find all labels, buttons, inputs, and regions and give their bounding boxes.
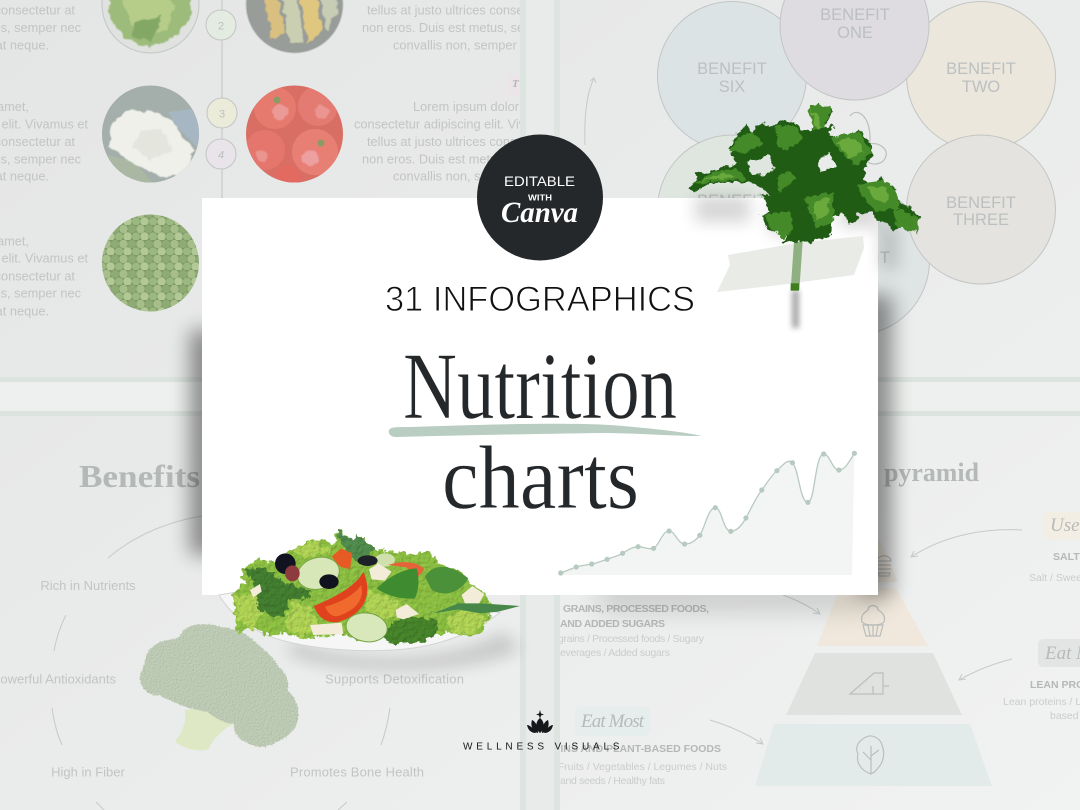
olive three	[358, 555, 378, 566]
circle: benefit five	[658, 135, 806, 284]
pyramid tier 2	[786, 653, 962, 715]
panel: benefits circle diagram	[585, 0, 1056, 335]
badge: editable with canva	[477, 134, 603, 260]
circle: benefit one: ONE	[837, 24, 873, 42]
right text blocks: tellus at justo ultrices consectetur at	[367, 134, 570, 149]
shadow: parsley on card	[695, 196, 898, 270]
right text blocks: Lorem ipsum dolor sit amet,	[413, 99, 571, 114]
photo: peas	[100, 212, 202, 314]
arrow: use sparingly to top tier	[911, 530, 1022, 557]
timeline node 4	[206, 139, 236, 169]
pyramid tier 3	[817, 588, 928, 646]
photo: lettuce	[107, 0, 193, 49]
text: grains and processed foods: grains / Processed foods / Sugary	[558, 633, 705, 645]
circle: benefit six: BENEFIT	[697, 60, 767, 78]
tomato wedge	[314, 572, 367, 622]
chart: rising line decoration	[558, 451, 857, 576]
right text blocks	[354, 5, 520, 182]
arrow: upward curve	[585, 78, 596, 145]
basil leaf two	[425, 567, 468, 593]
right text blocks: consectetur adipiscing elit. Vivamus et	[354, 116, 571, 132]
cucumber top	[294, 553, 343, 594]
circle: benefit two: BENEFIT	[946, 60, 1016, 78]
heading: pyramid: pyramid	[884, 457, 979, 487]
icon: centre food outline	[850, 112, 886, 164]
timeline node 4: 4	[218, 150, 224, 162]
icon: lotus	[527, 710, 553, 733]
olive two	[319, 574, 339, 589]
right text blocks: non eros. Duis est metus, semper nec	[362, 152, 578, 166]
panel: benefits wheel	[0, 458, 464, 810]
left text blocks: elit. Vivamus et	[1, 116, 88, 132]
chart line	[561, 453, 854, 573]
lettuce highlights	[235, 540, 487, 637]
label: rich in nutrients: Rich in Nutrients	[40, 578, 136, 593]
left text blocks: elit. Vivamus et	[1, 250, 88, 266]
timeline node 2: 2	[218, 20, 224, 32]
timeline node 2	[206, 10, 236, 40]
image: parsley sprig	[688, 103, 920, 291]
right text blocks: non eros. Duis est metus, semper nec	[362, 20, 578, 35]
label: promotes bone health: Promotes Bone Health	[290, 764, 424, 780]
right text blocks: T	[512, 78, 520, 90]
cheese pieces	[250, 563, 484, 635]
pyramid tier 4 top	[850, 540, 898, 582]
icon: cheese	[850, 673, 889, 694]
badge: editable with canva: WITH	[528, 192, 552, 202]
circle: benefit three: THREE	[953, 211, 1009, 229]
tag: use sparingly	[1043, 512, 1080, 540]
text: whole grains and plant foods: WHOLE GRAINS AND PLANT-BASED FOODS	[495, 743, 721, 755]
text: grains and processed foods	[558, 603, 709, 659]
circle: benefit six	[658, 2, 806, 150]
icon: lettuce leaf	[857, 736, 884, 774]
circle: benefit two	[906, 2, 1056, 150]
parsley bright leaves	[700, 110, 890, 220]
circle: benefit two: TWO	[962, 78, 1000, 96]
cucumber right top	[375, 553, 395, 567]
basil leaf	[377, 568, 418, 599]
logo text: WELLNESS VISUALS	[463, 742, 623, 752]
circle: benefit six: SIX	[719, 78, 745, 96]
cucumber bottom	[344, 610, 389, 644]
tag: eat most: Eat Most	[580, 711, 645, 732]
white card	[202, 198, 878, 595]
right text blocks: convallis non, semper at neque.	[393, 168, 574, 184]
plate	[219, 590, 500, 651]
label: supports detoxification: Supports Detoxification	[325, 672, 464, 686]
circle: benefit three	[906, 135, 1056, 284]
circle: benefit four	[780, 186, 930, 335]
olive one	[275, 553, 296, 574]
dark herb	[245, 567, 312, 617]
photo: tomatoes	[246, 86, 343, 182]
icon: burger	[877, 556, 891, 576]
heading: 31 infographics: 31 INFOGRAPHICS	[385, 279, 695, 319]
top arugula	[337, 527, 375, 563]
badge: editable with canva: Canva	[501, 196, 578, 229]
circle: benefit one	[780, 0, 929, 100]
parsley stem	[791, 242, 803, 290]
text: grains and processed foods: GRAINS, PROCESSED FOODS,	[563, 603, 709, 615]
image: broccoli	[140, 624, 299, 750]
parsley stem end	[791, 283, 799, 291]
logo: wellness visuals	[463, 710, 623, 752]
tag: eat most	[575, 707, 650, 736]
text: grains and processed foods: everages / Added sugars	[560, 647, 670, 659]
text: lean proteins	[1003, 679, 1080, 722]
timeline node 3: 3	[219, 108, 225, 120]
tag: use sparingly: Use	[1050, 515, 1080, 536]
vertical gutter	[520, 0, 560, 810]
parsley highlights	[693, 103, 918, 238]
chart area	[561, 453, 854, 575]
broccoli stem	[175, 703, 235, 750]
heading: benefits: Benefits	[79, 458, 200, 494]
photo outlines	[102, 0, 343, 53]
panel: vegetable timeline infographic	[0, 0, 520, 318]
right text blocks: tellus at justo ultrices consectetur at	[367, 2, 570, 18]
photo: cauliflower	[100, 85, 202, 185]
circle: benefit four: BENEFIT	[820, 249, 890, 267]
label: high in fiber: High in Fiber	[51, 764, 126, 780]
lettuce mass	[233, 527, 492, 645]
arrow: eat most to base tier	[710, 720, 763, 744]
timeline line	[221, 0, 223, 198]
stem shadow	[792, 290, 799, 328]
pyramid tier 1 base	[755, 724, 992, 786]
circle: benefit three: BENEFIT	[946, 194, 1016, 212]
arrow: eat moderately to protein tier	[959, 659, 1012, 680]
circle: benefit five: BENEFIT	[697, 192, 767, 210]
photo: corn	[245, 0, 345, 55]
text: salt	[1029, 551, 1080, 584]
text: whole grains and plant foods	[560, 745, 726, 786]
image: salad bowl	[219, 527, 520, 651]
green herb bunch	[383, 617, 438, 645]
card shadow	[190, 295, 892, 607]
shadow: plate	[290, 632, 520, 670]
text: whole grains and plant foods: Whole grains / Fruits / Vegetables / Legumes / Nuts	[488, 761, 727, 773]
arrow: grains to tier 3	[783, 595, 820, 614]
timeline node 3	[207, 98, 237, 128]
circle: benefit one: BENEFIT	[820, 6, 890, 24]
title: charts: charts	[442, 429, 639, 528]
horizontal gutter	[0, 377, 1080, 416]
brush underline	[389, 424, 702, 437]
chart points	[558, 451, 857, 576]
tomato right	[388, 562, 424, 578]
title: nutrition: Nutrition	[403, 333, 677, 439]
parsley foliage	[688, 103, 920, 243]
small tomato top	[332, 548, 352, 569]
text: whole grains and plant foods: and seeds / Healthy fats	[560, 775, 665, 787]
broccoli florets	[140, 624, 299, 747]
badge: editable with canva: EDITABLE	[504, 173, 575, 189]
icon: cupcake	[862, 606, 885, 636]
right text blocks: convallis non, semper at neque.	[393, 38, 574, 52]
text: grains and processed foods: AND ADDED SUGARS	[560, 618, 665, 630]
wheel arcs	[52, 515, 390, 810]
parsley silhouette	[688, 103, 920, 243]
washi tape	[717, 236, 864, 292]
long leaf	[433, 603, 520, 613]
olive red	[285, 565, 300, 581]
left text blocks	[0, 2, 88, 318]
tomato wedge flesh	[325, 585, 362, 616]
panel: food pyramid	[560, 462, 1080, 786]
tag: eat moderately	[1038, 639, 1080, 667]
